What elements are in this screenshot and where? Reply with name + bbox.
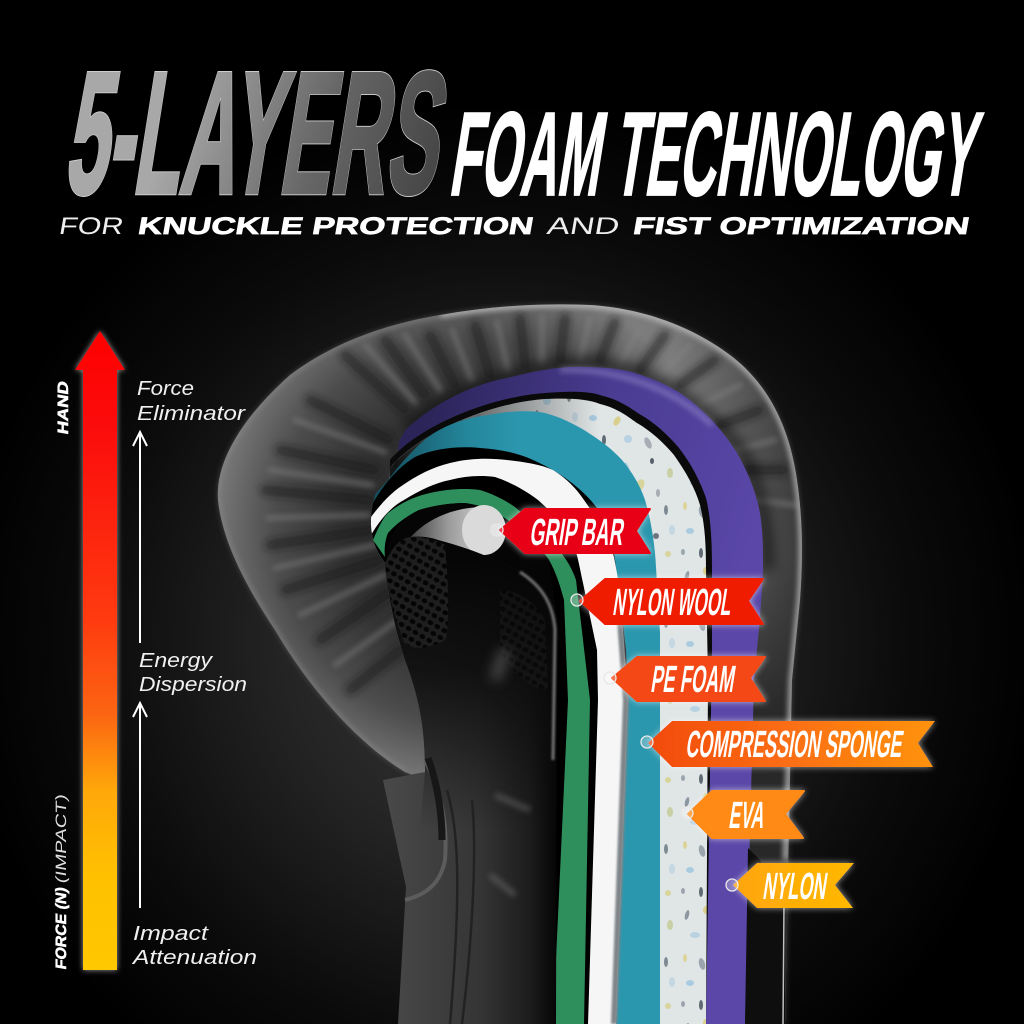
layer callouts — [500, 509, 935, 908]
pe foam shadow edge — [614, 620, 626, 1024]
layer: eva sponge speckle — [380, 399, 708, 1024]
subtitle: FIST OPTIMIZATION — [631, 213, 972, 240]
hand liner shading — [385, 537, 557, 830]
mesh vent right — [500, 590, 548, 690]
label: impact attenuation — [132, 923, 257, 969]
sponge shadow at the crown — [390, 398, 592, 478]
label: energy dispersion: Dispersion — [139, 674, 247, 696]
thumb strap and seam — [405, 760, 446, 900]
layer: nylon wool green — [373, 489, 590, 1024]
grip bar cylinder end — [462, 505, 506, 555]
subtitle: FOR — [57, 213, 126, 240]
layer: nylon purple — [380, 367, 763, 1024]
title: 5-LAYERS — [57, 37, 460, 231]
subtitle: AND — [545, 213, 622, 240]
callout anchor dots — [491, 524, 738, 891]
layer: pe foam white — [362, 459, 628, 1024]
label: impact attenuation: Attenuation — [132, 947, 257, 969]
layer: compression sponge teal — [370, 411, 660, 1024]
title: 5-layers — [57, 37, 460, 231]
hand liner and cuff — [383, 537, 557, 1024]
boxing glove cross-section — [218, 300, 810, 1024]
callout: pe foam: PE FOAM — [649, 658, 738, 701]
layer gap: black inner band — [366, 476, 598, 1024]
callout: nylon — [733, 863, 854, 908]
purple highlight — [560, 370, 712, 425]
grip bar cavity — [388, 503, 560, 640]
glove leather shell — [218, 300, 810, 1024]
callout: grip bar: GRIP BAR — [528, 511, 627, 554]
mesh vent left — [385, 537, 448, 648]
axis label: force impact — [53, 793, 70, 971]
label: energy dispersion: Energy — [139, 650, 213, 672]
layer gap: dark line — [380, 392, 712, 1024]
label: impact attenuation: Impact — [133, 923, 210, 945]
callout: pe foam — [612, 657, 765, 701]
arrow: impact to energy — [133, 703, 147, 908]
axis label: force impact: FORCE (N) — [53, 886, 70, 971]
wrist strap — [745, 848, 785, 1024]
callout: eva: EVA — [727, 794, 768, 837]
callout: nylon: NYLON — [761, 865, 830, 908]
label: energy dispersion — [139, 650, 247, 696]
hand highlight edge — [520, 572, 555, 760]
subtitle — [57, 213, 972, 240]
force gradient arrow — [75, 331, 125, 970]
callout: nylon wool: NYLON WOOL — [611, 581, 735, 624]
layer gap: black band — [365, 447, 628, 1024]
callout: eva — [688, 791, 804, 838]
label: force eliminator: Eliminator — [137, 403, 247, 425]
subtitle: KNUCKLE PROTECTION — [136, 213, 536, 240]
cuff base — [383, 537, 557, 1024]
axis label: hand: HAND — [55, 380, 72, 436]
label: force eliminator: Force — [137, 378, 194, 400]
axis label: force impact: (IMPACT) — [53, 793, 70, 885]
foam layers — [362, 367, 763, 1024]
label: force eliminator — [137, 378, 247, 425]
callout: nylon wool — [580, 579, 763, 624]
arrow: energy to force eliminator — [133, 432, 147, 643]
title: 5-LAYERS — [57, 37, 460, 231]
callout: grip bar — [500, 509, 650, 554]
callout: compression sponge — [648, 721, 935, 767]
